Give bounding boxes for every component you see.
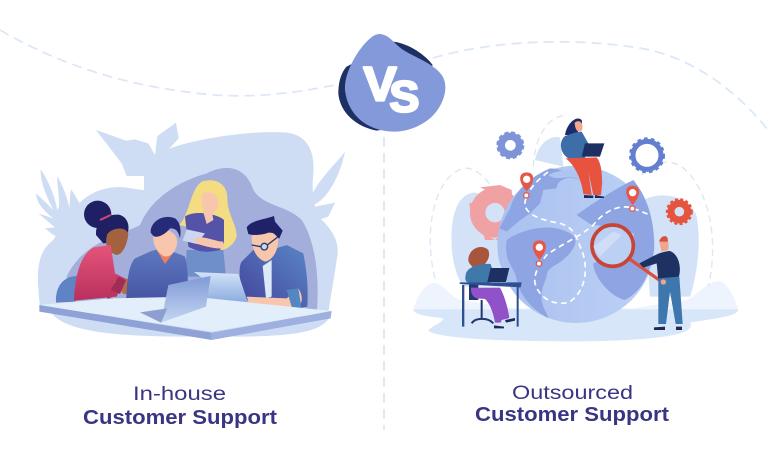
background shapes [413, 137, 738, 341]
dark backdrop blob [67, 168, 318, 313]
laptop: back [194, 272, 269, 314]
map pins [520, 172, 639, 266]
dashed divider [383, 137, 385, 430]
person: man with magnifier [639, 236, 683, 330]
label: outsourced: Outsourced [512, 383, 633, 404]
label: outsourced [475, 383, 669, 426]
dashed connector: top left [0, 30, 335, 96]
gear: blue ring [633, 141, 661, 169]
illustration: in-house team [36, 123, 345, 340]
label: in-house [83, 384, 277, 429]
label: outsourced: Customer Support [475, 404, 669, 426]
label: in-house: Customer Support [83, 407, 277, 429]
person: standing woman [179, 180, 237, 277]
laptop: front [140, 276, 211, 323]
VS text: S [389, 74, 419, 122]
round stool [56, 276, 77, 303]
gear: periwinkle small [501, 136, 519, 154]
blob [345, 34, 445, 132]
VS text [363, 58, 419, 122]
label: in-house: In-house [133, 384, 226, 405]
blob shadow [338, 42, 433, 131]
magnifying glass [592, 225, 675, 291]
VS badge [338, 34, 445, 132]
person: man in blue shirt [126, 217, 188, 309]
route dashes [525, 172, 650, 303]
person: man with glasses [240, 216, 308, 310]
illustration: outsourcing globe [413, 115, 738, 341]
gear: pink [469, 185, 513, 240]
table [39, 297, 332, 340]
dashed connector: top right [433, 42, 768, 130]
VS text: V [363, 58, 397, 112]
person: woman in red [74, 201, 165, 311]
dashed orbit lines [430, 115, 713, 287]
globe [497, 166, 655, 323]
person: woman on globe [561, 119, 604, 198]
background blob and leaves [36, 123, 345, 337]
gear: red [671, 203, 688, 220]
person: woman at desk [459, 247, 522, 328]
